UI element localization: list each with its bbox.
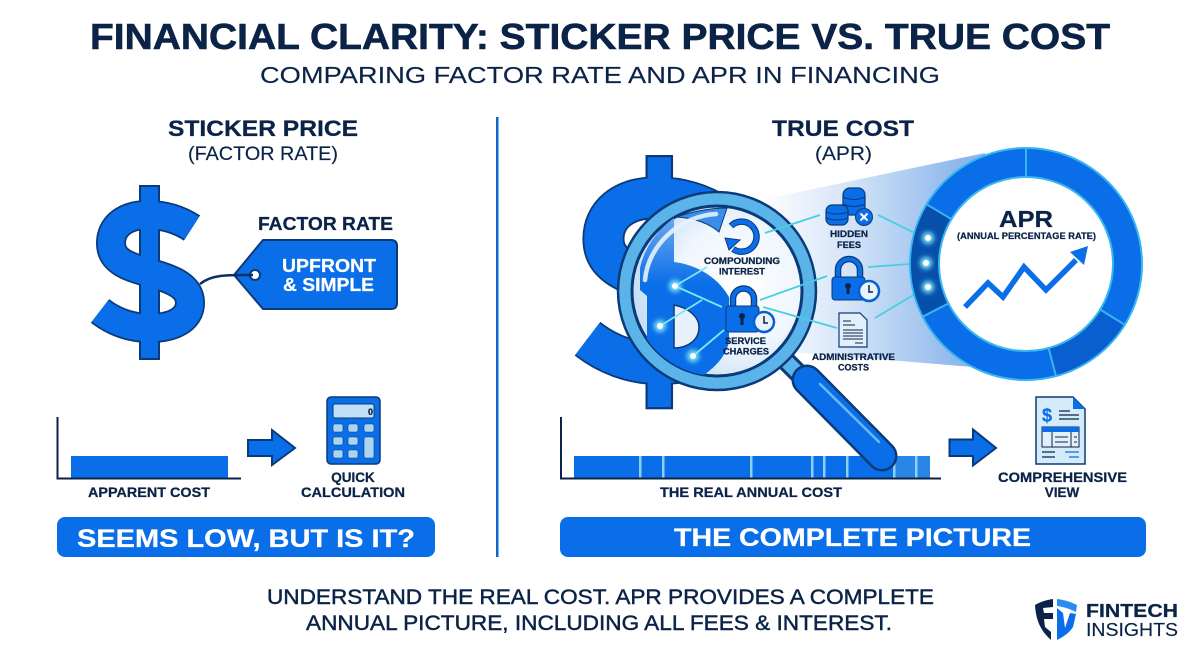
wordmark — [1086, 600, 1178, 640]
label: annual percentage rate: (ANNUAL PERCENTAGE RATE) — [957, 231, 1096, 242]
subtitle: COMPARING FACTOR RATE AND APR IN FINANCING — [260, 62, 940, 88]
label: administrative costs: COSTS — [838, 362, 869, 372]
banner: seems low: SEEMS LOW, BUT IS IT? — [77, 525, 415, 553]
subheading: apr: (APR) — [815, 144, 872, 165]
magnified beam — [760, 153, 985, 368]
connector lines — [868, 215, 925, 318]
panel: true cost — [560, 116, 1146, 557]
icon: calculator — [327, 397, 380, 464]
banner: complete picture: THE COMPLETE PICTURE — [674, 524, 1031, 552]
label: service charges: SERVICE — [725, 336, 766, 346]
heading: sticker price: STICKER PRICE — [168, 116, 358, 141]
icon: rising trend arrow — [965, 246, 1088, 307]
icon: report document: $ — [1042, 406, 1052, 426]
label: quick calculation — [301, 470, 405, 500]
icon: compounding arrow — [725, 222, 757, 252]
icon: report document — [1036, 397, 1085, 464]
wordmark: FINTECH — [1086, 600, 1178, 621]
chart: real annual cost — [561, 417, 941, 500]
icon: large dollar sign — [588, 155, 721, 409]
magnifier handle — [807, 380, 882, 456]
subheading: factor rate: (FACTOR RATE) — [188, 144, 338, 165]
footer message: ANNUAL PICTURE, INCLUDING ALL FEES & INTEREST. — [306, 612, 892, 635]
footer message: UNDERSTAND THE REAL COST. APR PROVIDES A COMPLETE — [267, 586, 934, 609]
label: administrative costs — [812, 352, 895, 372]
banner: seems low — [57, 517, 435, 557]
icon: dollar sign — [100, 185, 192, 360]
icon: hidden fees — [826, 188, 872, 250]
icon: document — [839, 313, 867, 347]
lens rim — [618, 192, 816, 390]
label: service charges — [723, 336, 769, 356]
label: quick calculation: QUICK — [331, 470, 375, 485]
magnifying glass — [618, 192, 882, 456]
footer message — [267, 586, 934, 635]
panel: sticker price — [57, 116, 435, 557]
title: FINANCIAL CLARITY: STICKER PRICE VS. TRUE COST — [90, 16, 1110, 57]
label: apr: APR — [999, 206, 1053, 232]
heading: true cost: TRUE COST — [772, 116, 915, 141]
wordmark: INSIGHTS — [1086, 619, 1178, 640]
label: factor rate: FACTOR RATE — [258, 214, 393, 234]
lens connector lines — [654, 215, 837, 362]
arrow: to calculator — [248, 430, 295, 465]
chart: apparent cost: APPARENT COST — [88, 485, 211, 500]
logo: fintech insights — [1035, 599, 1178, 640]
label: compounding interest: INTEREST — [719, 266, 765, 276]
icon: hidden fees: HIDDEN — [830, 229, 868, 239]
price tag — [200, 240, 397, 309]
lens sheen — [645, 214, 716, 280]
icon: service charges lock — [726, 288, 774, 332]
banner: complete picture — [560, 517, 1146, 557]
label: administrative costs: ADMINISTRATIVE — [812, 352, 895, 362]
icon: shield — [1035, 599, 1077, 640]
icon: calculator: 0 — [368, 407, 373, 417]
label: compounding interest: COMPOUNDING — [704, 256, 780, 266]
icon: lock with clock — [832, 259, 879, 301]
arrow: to comprehensive view — [950, 430, 996, 466]
chart: real annual cost: THE REAL ANNUAL COST — [660, 485, 843, 500]
price tag: UPFRONT — [282, 256, 376, 276]
label: comprehensive view: COMPREHENSIVE — [998, 470, 1127, 485]
label: comprehensive view: VIEW — [1045, 485, 1080, 500]
apr ring — [909, 147, 1143, 381]
price tag: & SIMPLE — [283, 275, 374, 295]
label: comprehensive view — [998, 470, 1127, 500]
icon: hidden fees: FEES — [837, 240, 861, 250]
label: quick calculation: CALCULATION — [301, 485, 405, 500]
divider — [496, 117, 498, 557]
magnifier neck — [785, 360, 806, 381]
chart: apparent cost — [58, 417, 241, 500]
lens contents — [640, 208, 729, 376]
glowing dots — [920, 232, 934, 293]
label: service charges: CHARGES — [723, 346, 769, 356]
label: compounding interest — [704, 256, 780, 276]
